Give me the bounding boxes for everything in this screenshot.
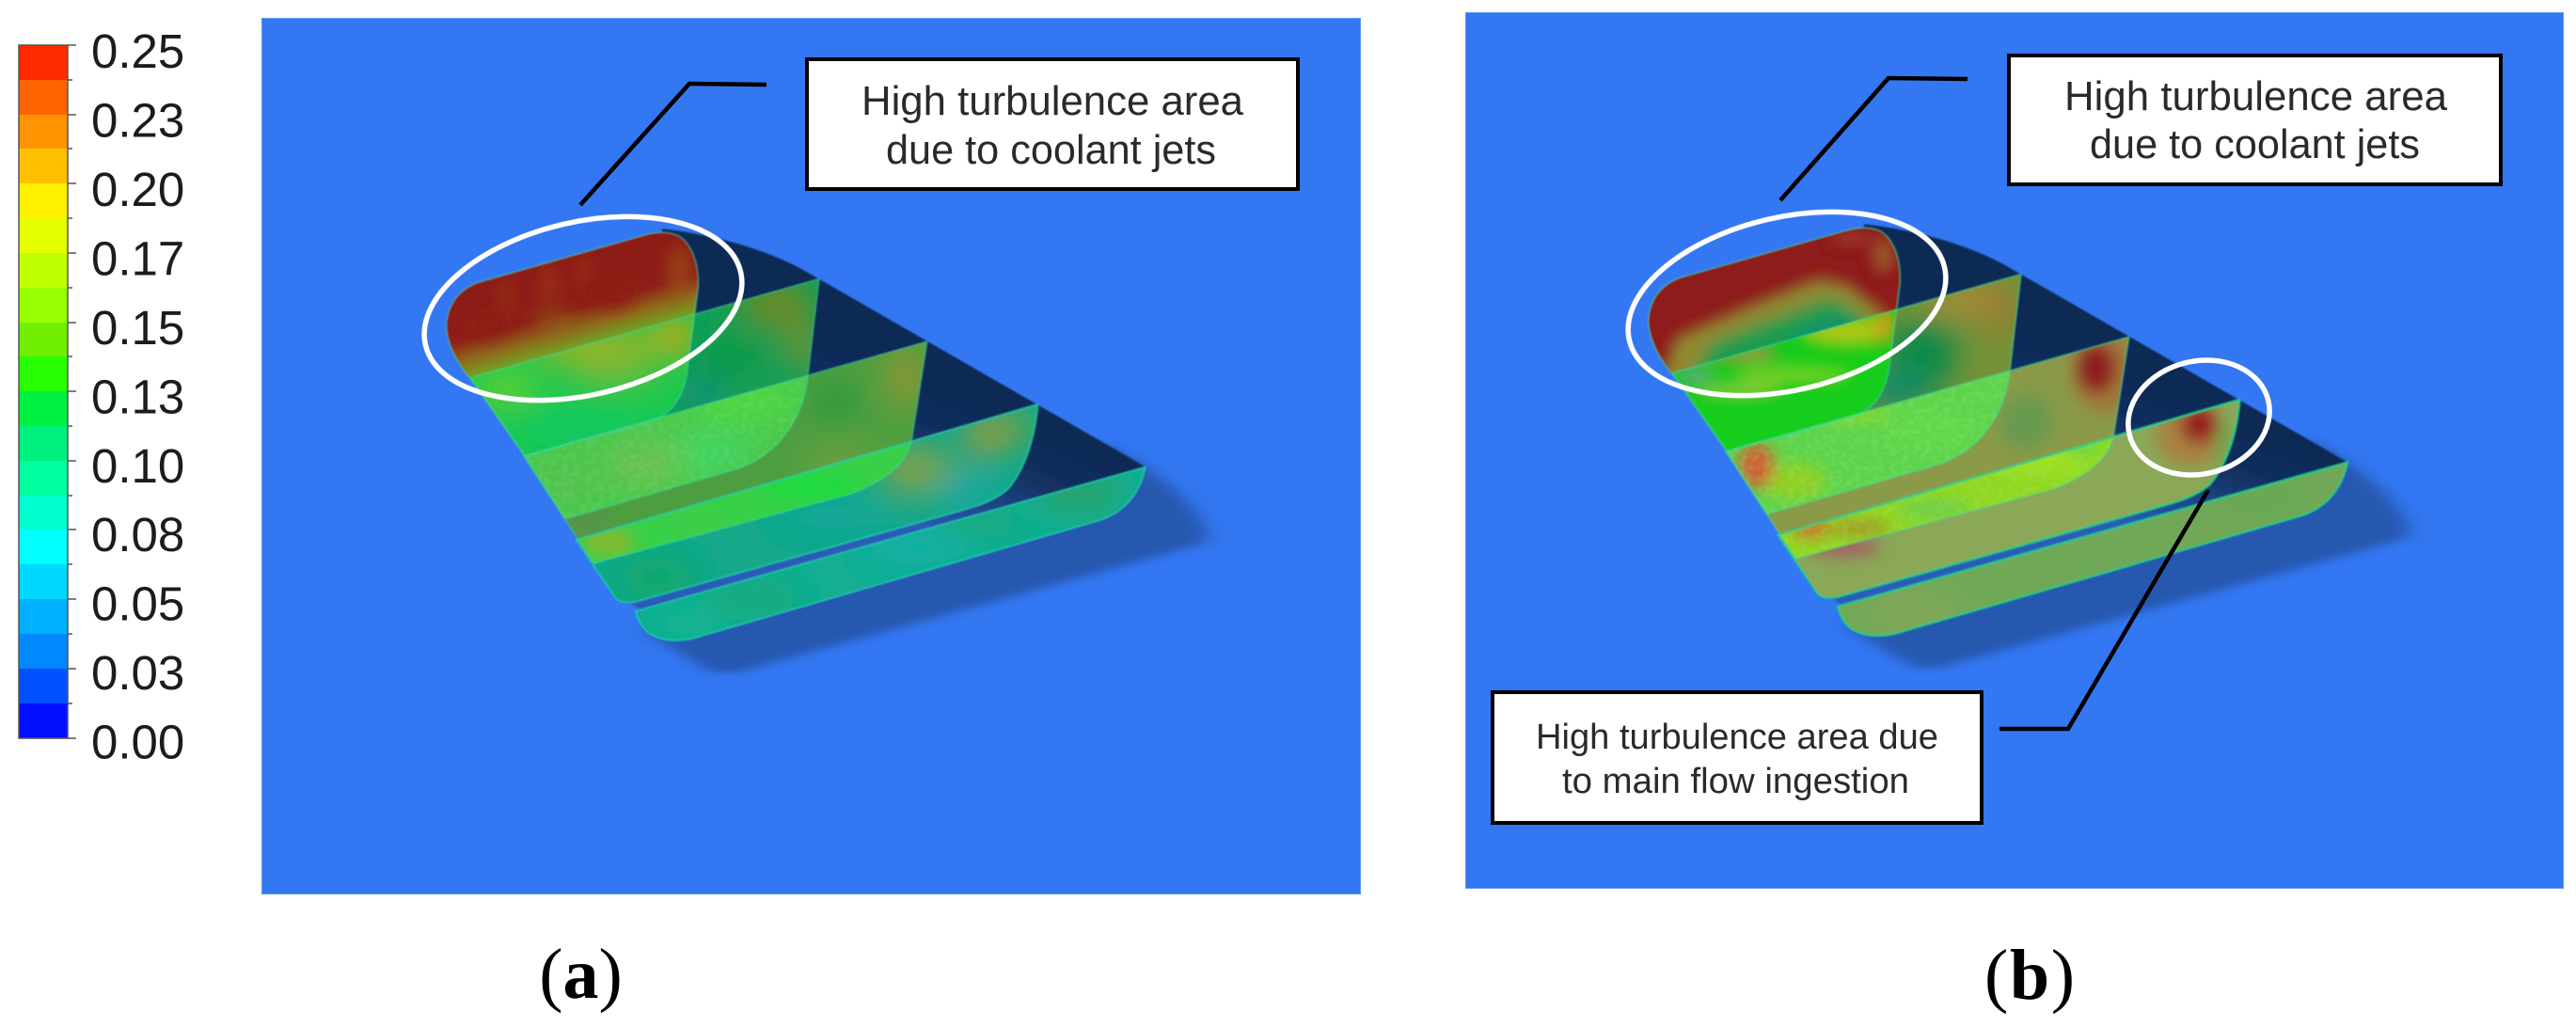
slice 3 <box>523 340 928 540</box>
slice 1 over slice 2 overlap <box>1672 309 1897 451</box>
slice edges <box>576 404 1146 640</box>
colour scale values: 0.15 <box>91 301 184 355</box>
colour scale values: 0.03 <box>91 646 184 700</box>
callout: main flow ingestion (b): to main flow ingestion <box>1562 762 1909 801</box>
colour scale values: 0.23 <box>91 94 184 147</box>
slice 2 <box>662 278 820 418</box>
blade contour: panel a <box>430 219 1208 672</box>
leader line: main flow ingestion (b) <box>1999 490 2208 729</box>
panel: (a) contour plot <box>261 19 1360 893</box>
slice 2 over slice 3 overlap <box>525 376 809 519</box>
callout: coolant jets (a): High turbulence area <box>861 78 1244 124</box>
cast shadow <box>646 444 1208 672</box>
callout: coolant jets (a): due to coolant jets <box>886 127 1216 173</box>
slice 1 over slice 2 overlap <box>471 314 696 455</box>
slice 3 over slice 4 overlap <box>1781 438 2112 559</box>
callout: coolant jets (b) <box>2009 55 2501 184</box>
slice 5 <box>630 461 1154 646</box>
highlight ellipse: main flow ingestion (b) <box>2116 345 2282 490</box>
caption: (a): (a) <box>539 935 623 1014</box>
callout: coolant jets (a) <box>807 59 1298 189</box>
slice 4 <box>1778 393 2253 607</box>
colour scale values: 0.17 <box>91 231 184 286</box>
panel: colour scale legend <box>19 24 184 769</box>
colour scale values: 0.20 <box>91 163 184 216</box>
highlight ellipse: coolant jets (a) <box>406 188 760 429</box>
callout: main flow ingestion (b): High turbulence area due <box>1536 718 1938 757</box>
slice 1 <box>1648 226 1902 449</box>
blade contour: panel b <box>1632 214 2410 668</box>
colour scale values: 0.10 <box>91 439 184 493</box>
slice 3 <box>1725 337 2130 534</box>
slice 1 <box>446 231 700 454</box>
colour scale values: 0.05 <box>91 577 184 630</box>
colour scale values: 0.00 <box>91 715 184 769</box>
slice 2 <box>1864 274 2022 412</box>
slice 4 <box>576 398 1051 611</box>
dark blade backing <box>616 229 1146 609</box>
leader line: coolant jets (b) <box>1780 78 1968 200</box>
colour bar <box>19 45 76 738</box>
callout: main flow ingestion (b) <box>1493 692 1982 823</box>
slice edges <box>1778 400 2347 636</box>
colour scale values: 0.25 <box>91 24 184 78</box>
panel: (b) contour plot <box>1465 13 2564 888</box>
cast shadow <box>1848 439 2410 668</box>
dark blade backing <box>1818 224 2347 605</box>
colour scale values: 0.08 <box>91 508 184 561</box>
callout: coolant jets (b): due to coolant jets <box>2090 121 2420 167</box>
callout: coolant jets (b): High turbulence area <box>2064 73 2448 119</box>
colour scale values: 0.13 <box>91 371 184 423</box>
caption: (b): (b) <box>1984 936 2075 1015</box>
slice 2 over slice 3 overlap <box>1727 371 2011 514</box>
highlight ellipse: coolant jets (b) <box>1610 183 1964 424</box>
colour scale values <box>91 24 184 769</box>
slice 5 <box>1832 456 2356 641</box>
slice 3 over slice 4 overlap <box>577 442 910 564</box>
leader line: coolant jets (a) <box>580 84 766 205</box>
